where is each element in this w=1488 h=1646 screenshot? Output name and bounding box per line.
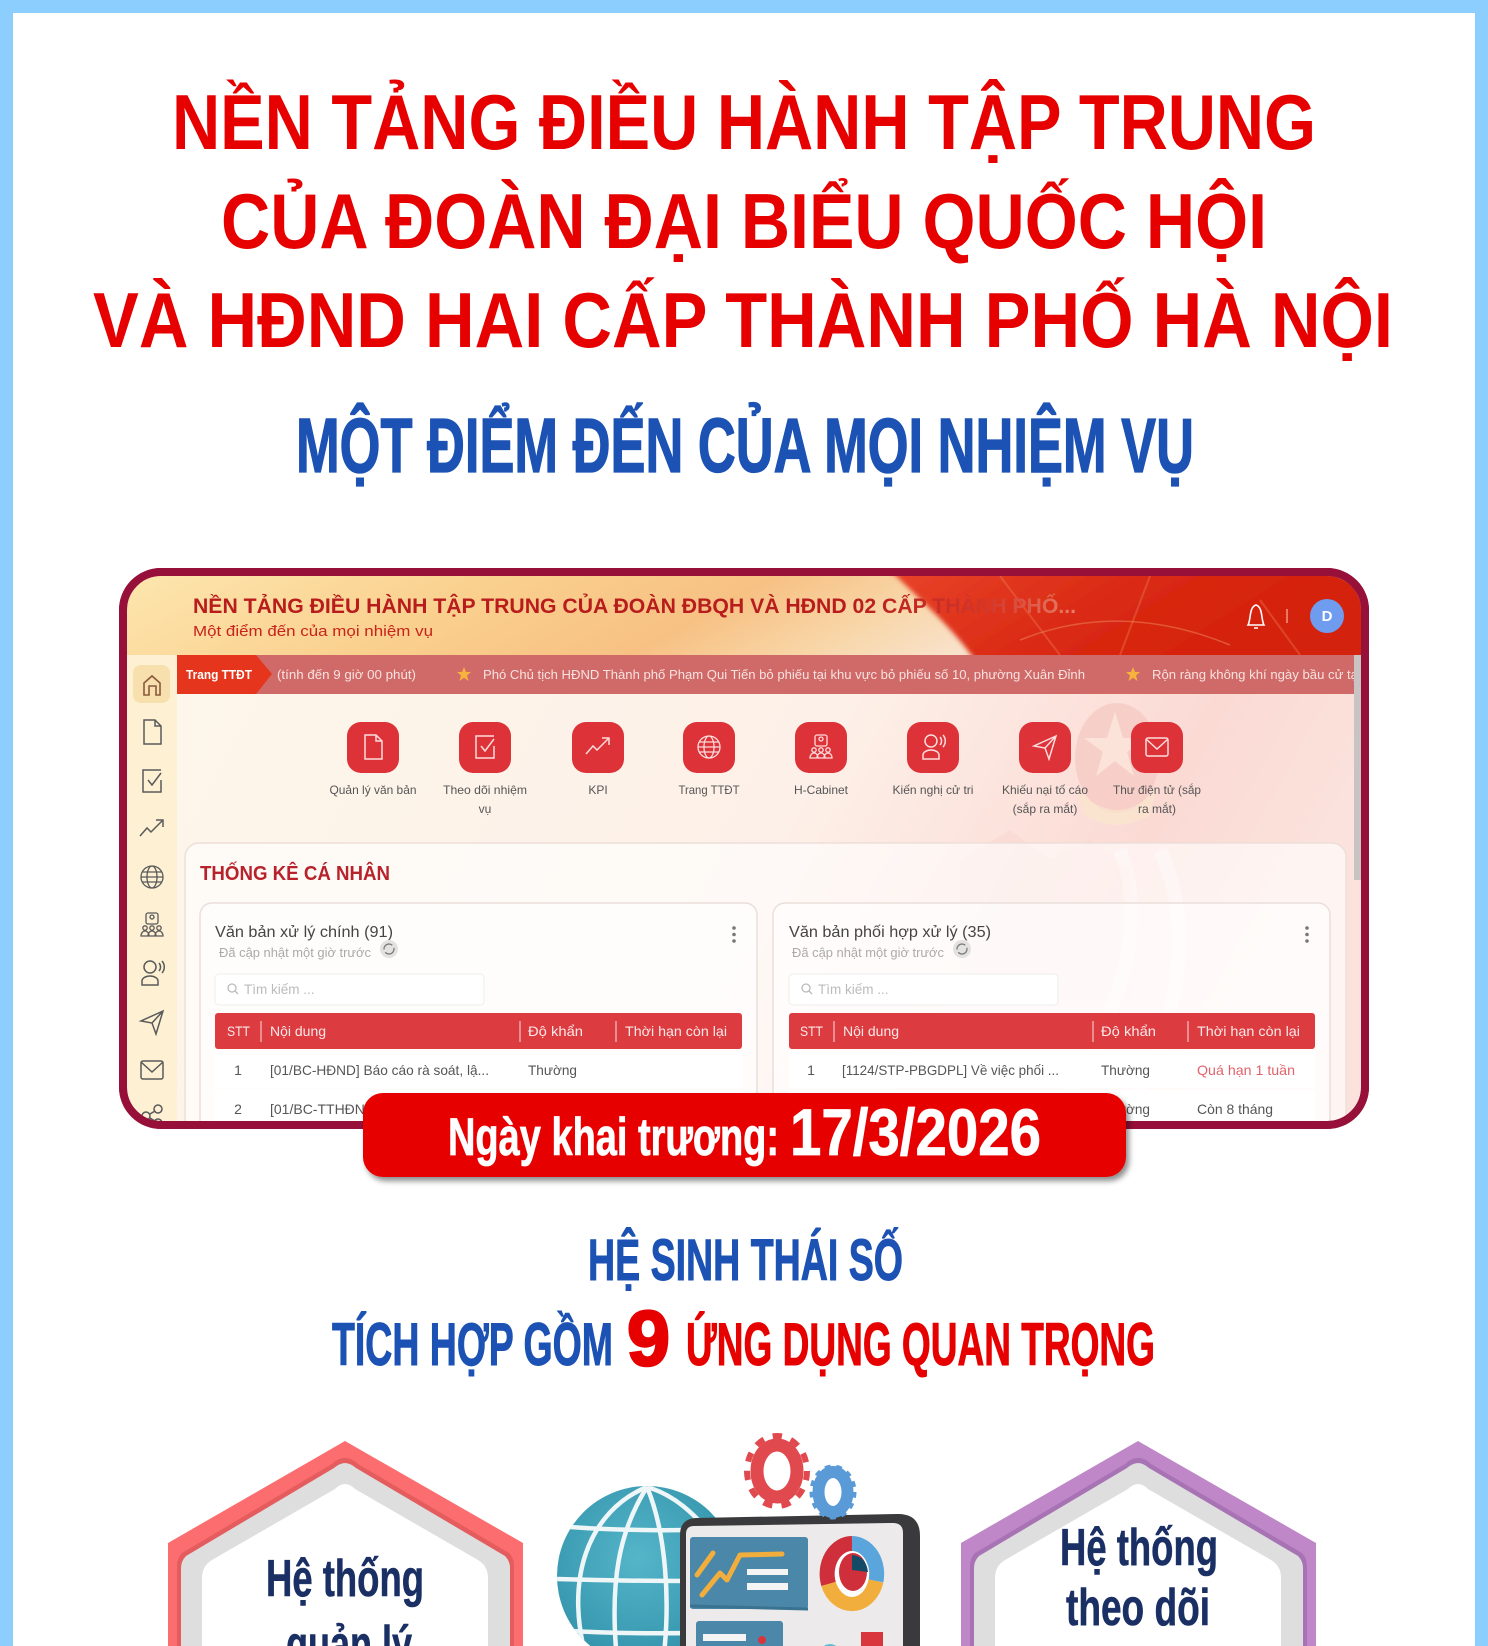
hexagon card: document management: Hệ thống <box>266 1550 424 1608</box>
app: Trang TTĐT: Trang TTĐT <box>678 783 740 797</box>
app: Khiếu nại tố cáo: (sắp ra mắt) <box>1013 801 1077 816</box>
card: coordinated documents: Độ khẩn <box>1101 1023 1156 1039</box>
app: Kiến nghị cử tri: Kiến nghị cử tri <box>892 783 974 797</box>
app: Thư điện tử: Thư điện tử (sắp <box>1113 782 1201 797</box>
card: main documents: Thời hạn còn lại <box>625 1023 727 1039</box>
card: coordinated documents: Văn bản phối hợp xử lý (35) <box>789 924 991 941</box>
main title: NỀN TẢNG ĐIỀU HÀNH TẬP TRUNG <box>172 78 1316 166</box>
card: main documents: Thường <box>528 1062 577 1078</box>
card: coordinated documents: Nội dung <box>843 1023 899 1039</box>
app: KPI <box>572 722 624 797</box>
card: main documents: STT <box>227 1023 250 1039</box>
icon: notification bell and avatar: D <box>1322 608 1333 625</box>
news ticker: Rộn ràng không khí ngày bầu cử tạ <box>1152 667 1359 682</box>
section heading: ecosystem: HỆ SINH THÁI SỐ <box>588 1228 903 1293</box>
panel: platform screenshot <box>123 570 1370 1143</box>
launch date badge: 17/3/2026 <box>790 1095 1041 1169</box>
panel: personal statistics <box>185 843 1346 1143</box>
card: main documents: Đã cập nhật một giờ trước <box>219 946 371 960</box>
main background with faint emblem <box>177 694 1361 1124</box>
card: main documents: Nội dung <box>270 1023 326 1039</box>
hexagon card: task tracking: theo dõi <box>1066 1579 1210 1637</box>
app: Trang TTĐT <box>678 722 740 797</box>
app: Theo dõi nhiệm vụ: Theo dõi nhiệm <box>443 783 527 797</box>
hexagon card: task tracking: Hệ thống <box>1060 1519 1218 1577</box>
card: main documents: [01/BC-TTHĐND <box>270 1101 375 1117</box>
card: coordinated documents: Thường <box>1101 1062 1150 1078</box>
card: main documents: Tìm kiếm ... <box>244 982 314 997</box>
illustration: globe and dashboard with gears <box>555 1436 920 1646</box>
main title <box>93 78 1393 364</box>
panel: personal statistics: THỐNG KÊ CÁ NHÂN <box>200 861 390 885</box>
app: Theo dõi nhiệm vụ <box>443 722 527 816</box>
news ticker: (tính đến 9 giờ 00 phút) <box>277 667 416 682</box>
app: Theo dõi nhiệm vụ: vụ <box>479 802 491 816</box>
app header band: Một điểm đến của mọi nhiệm vụ <box>193 623 433 640</box>
card: coordinated documents: Đã cập nhật một giờ trước <box>792 946 944 960</box>
card: main documents <box>200 903 757 1143</box>
card: coordinated documents: 1 <box>807 1062 815 1078</box>
news ticker: Phó Chủ tịch HĐND Thành phố Phạm Qui Tiến bỏ phiếu tại khu vực bỏ phiếu số 10, phường Xuân Đỉnh <box>483 667 1085 682</box>
app: Khiếu nại tố cáo <box>1002 722 1088 816</box>
app header band <box>127 576 1361 655</box>
icon: globe <box>557 1486 716 1646</box>
hexagon card: task tracking <box>961 1441 1316 1646</box>
scrollbar <box>1354 655 1361 880</box>
app: Kiến nghị cử tri <box>892 722 974 797</box>
card: coordinated documents: 2 <box>807 1101 815 1117</box>
launch date badge <box>363 1093 1126 1177</box>
app: KPI: KPI <box>588 783 608 797</box>
section heading: ecosystem: TÍCH HỢP GỒM <box>332 1311 613 1378</box>
app shortcut icons <box>330 722 1201 816</box>
app: H-Cabinet <box>794 722 849 797</box>
sidebar <box>127 655 177 1127</box>
app: Thư điện tử: ra mắt) <box>1138 801 1176 816</box>
card: coordinated documents: Thường <box>1101 1101 1150 1117</box>
card: coordinated documents: Quá hạn 1 tuần <box>1197 1062 1295 1078</box>
card: main documents: Văn bản xử lý chính (91) <box>215 924 393 941</box>
app header band: NỀN TẢNG ĐIỀU HÀNH TẬP TRUNG CỦA ĐOÀN ĐBQH VÀ HĐND 02 CẤP THÀNH PHỐ... <box>193 594 1076 618</box>
app: H-Cabinet: H-Cabinet <box>794 783 849 797</box>
icon: red gear <box>747 1436 807 1506</box>
card: main documents: Độ khẩn <box>528 1023 583 1039</box>
card: coordinated documents: Tìm kiếm ... <box>818 982 888 997</box>
section heading: ecosystem <box>332 1228 1155 1382</box>
card: coordinated documents: [1124/STP-PBGDPL] Về việc phối ... <box>842 1062 1059 1078</box>
chart: donut <box>827 1544 877 1604</box>
app: Quản lý văn bản <box>330 722 416 797</box>
news ticker <box>177 655 1359 694</box>
card: main documents: 2 <box>234 1101 242 1117</box>
news ticker: Trang TTĐT <box>186 668 252 682</box>
app: Thư điện tử <box>1113 722 1201 816</box>
card: coordinated documents <box>773 903 1330 1143</box>
icon: dashboard tablet <box>680 1514 920 1646</box>
section heading: ecosystem: 9 <box>627 1294 670 1382</box>
card: main documents: [01/BC-HĐND] Báo cáo rà soát, lậ... <box>270 1062 489 1078</box>
card: coordinated documents: Thời hạn còn lại <box>1197 1023 1300 1039</box>
main title: CỦA ĐOÀN ĐẠI BIỂU QUỐC HỘI <box>221 177 1267 265</box>
card: coordinated documents: Còn 8 tháng <box>1197 1101 1273 1117</box>
icon: blue gear <box>812 1466 854 1518</box>
card: main documents: 1 <box>234 1062 242 1078</box>
hexagon card: document management <box>168 1441 523 1646</box>
app: Quản lý văn bản: Quản lý văn bản <box>330 783 416 797</box>
section heading: ecosystem: ỨNG DỤNG QUAN TRỌNG <box>686 1311 1155 1378</box>
launch date badge: Ngày khai trương: <box>448 1108 779 1167</box>
icon: notification bell and avatar <box>1248 599 1344 633</box>
app: Khiếu nại tố cáo: Khiếu nại tố cáo <box>1002 783 1088 797</box>
card: coordinated documents: STT <box>800 1023 823 1039</box>
